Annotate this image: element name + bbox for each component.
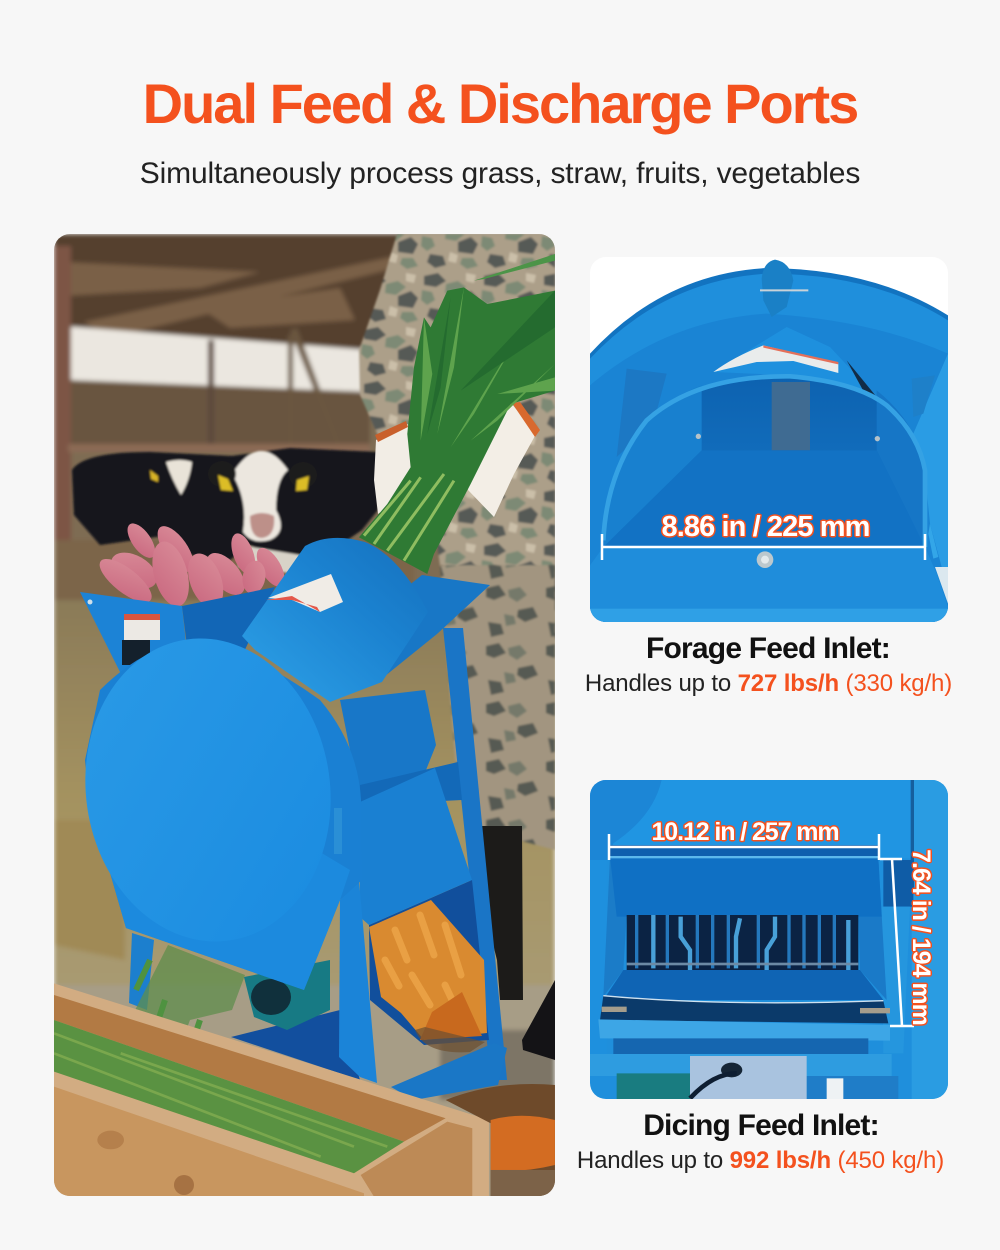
bolts — [696, 434, 701, 439]
sweet potatoes — [100, 523, 284, 606]
farmer in camouflage — [359, 234, 555, 1060]
top hood — [590, 780, 662, 860]
lower band — [613, 1038, 868, 1055]
right column — [912, 780, 948, 1099]
dimension line: dicing width — [608, 834, 880, 860]
chute cone — [715, 327, 862, 389]
panel: forage feed inlet photo — [590, 260, 948, 622]
orange dicing discharge — [369, 900, 487, 1052]
subtitle: Simultaneously process grass, straw, fruits, vegetables — [140, 157, 860, 190]
wooden trough — [54, 983, 489, 1197]
feed chute right — [242, 538, 490, 702]
springs — [602, 1009, 890, 1011]
title: Dual Feed & Discharge Ports — [143, 72, 857, 135]
discharge chute — [360, 768, 472, 925]
boot: left leg — [522, 980, 555, 1060]
glove and cuff: right — [468, 405, 534, 517]
dimension: forage width: 8.86 in / 225 mm — [661, 511, 870, 543]
inner hopper walls — [603, 857, 627, 997]
warning label — [124, 620, 160, 640]
arch interior — [702, 378, 877, 450]
arch rim — [603, 376, 925, 547]
switch box — [690, 1056, 807, 1099]
dimension: dicing depth: 7.64 in / 194 mm — [907, 849, 935, 1025]
panel: dicing feed inlet photo — [590, 780, 948, 1099]
stand legs — [129, 628, 507, 1100]
housing shell — [590, 268, 948, 622]
barn background — [54, 234, 555, 1200]
hopper floor — [603, 970, 883, 1000]
dark lip — [600, 996, 888, 1023]
right strip — [883, 906, 910, 907]
basket of corn — [446, 1084, 555, 1197]
cows — [72, 448, 378, 575]
dimension line: forage width — [600, 534, 926, 560]
panel: main machine scene — [54, 234, 555, 1196]
left bracket — [617, 369, 667, 457]
dimension: dicing width: 10.12 in / 257 mm — [652, 818, 838, 846]
boot: right leg — [482, 826, 523, 1000]
text: dicing capacity: Handles up to 992 lbs/h (450 kg/h) — [577, 1147, 944, 1174]
right side panel — [914, 354, 948, 567]
dimension line: dicing depth — [880, 858, 914, 1028]
motor cover — [340, 690, 462, 805]
dark panel behind discharge — [369, 880, 489, 1045]
green discharge — [133, 945, 245, 1030]
front leg — [339, 880, 377, 1083]
heading: dicing feed inlet: Dicing Feed Inlet: — [643, 1109, 879, 1142]
heading: forage feed inlet: Forage Feed Inlet: — [646, 632, 890, 665]
round housing — [85, 638, 361, 990]
latch — [762, 260, 793, 317]
hopper left — [80, 587, 275, 680]
front strip — [598, 1019, 890, 1041]
green forage bundle — [359, 254, 555, 574]
blade slots — [627, 915, 858, 970]
left column — [590, 860, 607, 1060]
chopped grass — [54, 1020, 404, 1173]
glove and cuff: left — [374, 424, 411, 514]
front plate — [590, 547, 948, 622]
motor — [244, 960, 330, 1030]
text: forage capacity: Handles up to 727 lbs/h (330 kg/h) — [585, 670, 952, 697]
